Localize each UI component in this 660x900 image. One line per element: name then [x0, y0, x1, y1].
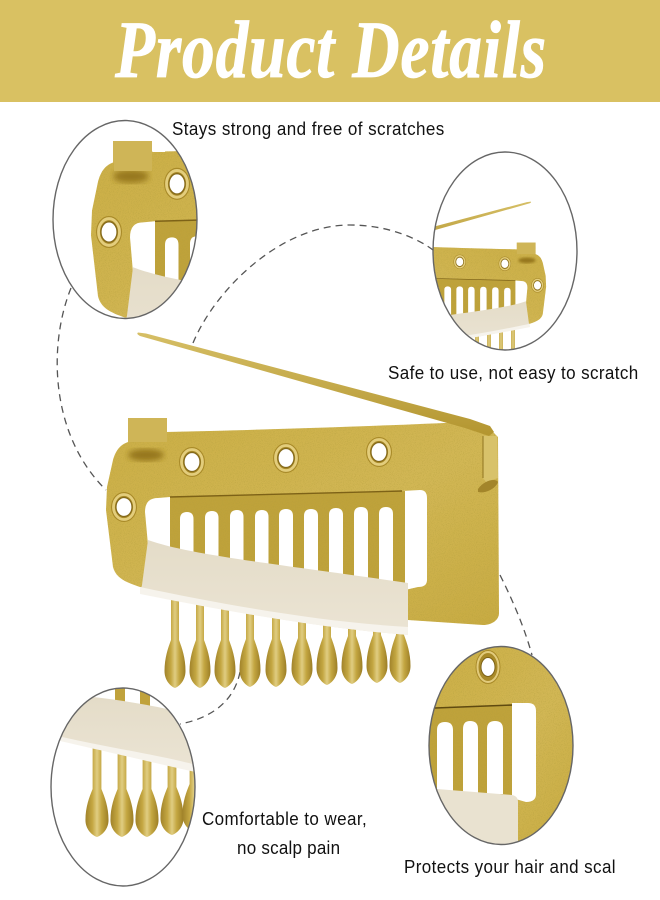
- caption: safe to use: Safe to use, not easy to scratch: [388, 362, 638, 383]
- title: Product Details: [114, 5, 546, 96]
- main product: hair clip with comb, pin and silicone strip: [106, 332, 499, 688]
- caption: comfortable to wear: Comfortable to wear,: [202, 808, 367, 829]
- caption: comfortable to wear: [202, 808, 367, 858]
- inset circle: bottom right detail: [428, 646, 574, 846]
- caption: stays strong: Stays strong and free of scratches: [172, 118, 444, 139]
- dashed connector lines: [57, 225, 532, 724]
- inset circle: top right detail: [432, 151, 578, 351]
- caption: comfortable to wear: no scalp pain: [237, 837, 340, 858]
- caption: protects hair: Protects your hair and scal: [404, 856, 616, 877]
- inset circle: top left detail: [52, 120, 198, 320]
- inset circle: bottom left detail: [50, 685, 206, 886]
- title banner: [0, 0, 660, 102]
